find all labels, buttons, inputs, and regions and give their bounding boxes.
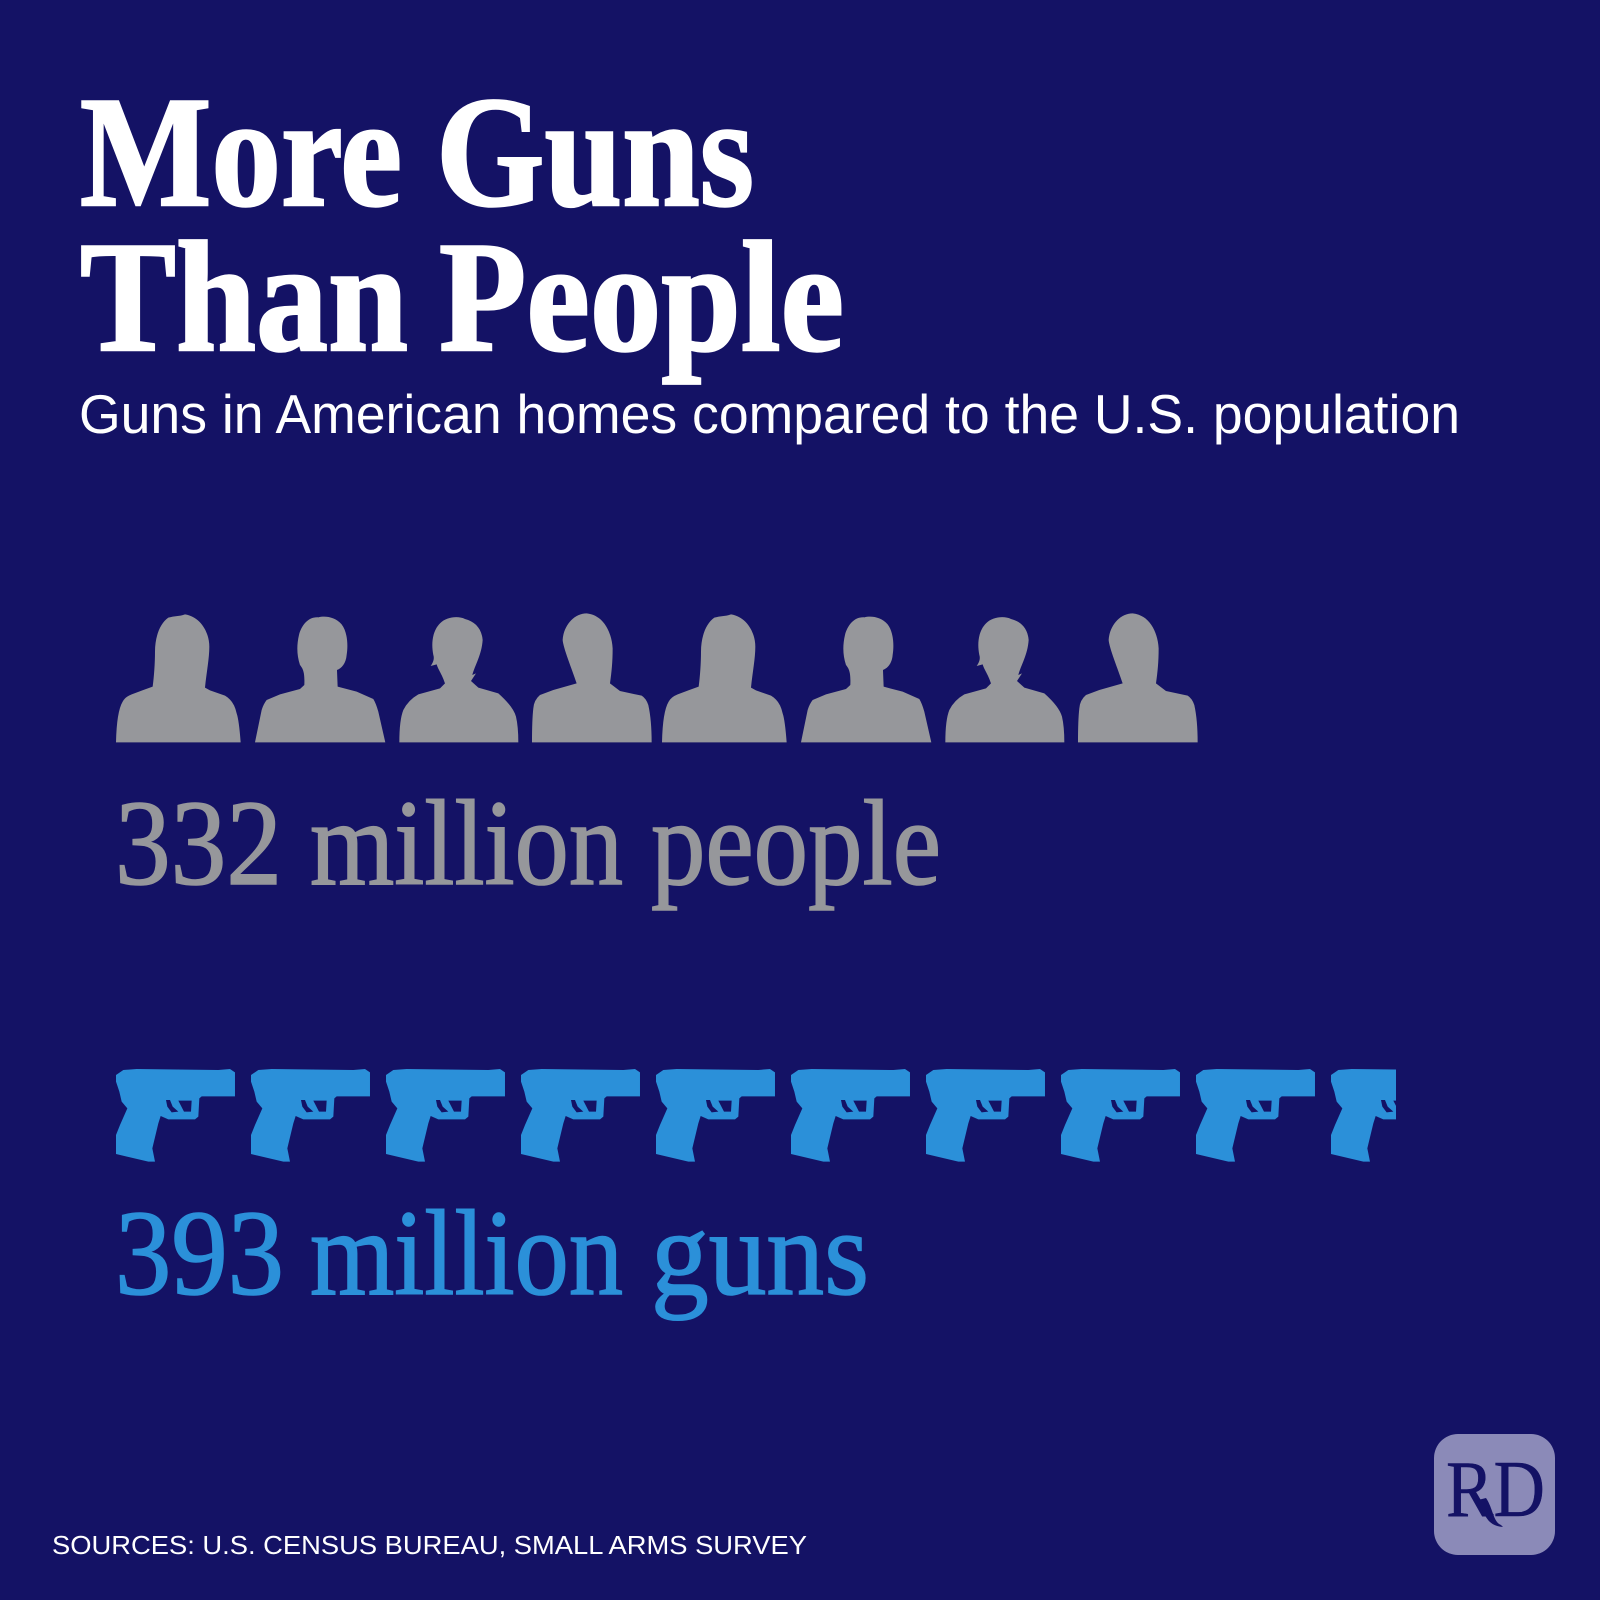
title: More [80, 65, 402, 240]
logo: RD badge: RD [1446, 1446, 1545, 1534]
people count label: 332 [115, 776, 282, 911]
title: Guns [436, 65, 754, 240]
sources note: SOURCES: U.S. CENSUS BUREAU, SMALL ARMS SURVEY [52, 1530, 807, 1560]
people count label: million [310, 776, 623, 911]
gun pictogram row [116, 1069, 1450, 1162]
logo: RD badge [1434, 1434, 1555, 1555]
guns count label: million [310, 1186, 623, 1321]
subtitle: Guns in American homes compared to the U.S. population [79, 383, 1460, 445]
people pictogram row [116, 613, 1198, 742]
guns count label: 393 [115, 1186, 284, 1321]
people count label: people [651, 776, 941, 911]
people count label [115, 776, 941, 911]
guns count label: guns [651, 1186, 869, 1321]
title: Than [80, 210, 408, 385]
title: People [439, 210, 844, 385]
guns count label [115, 1186, 869, 1321]
title [80, 65, 844, 385]
